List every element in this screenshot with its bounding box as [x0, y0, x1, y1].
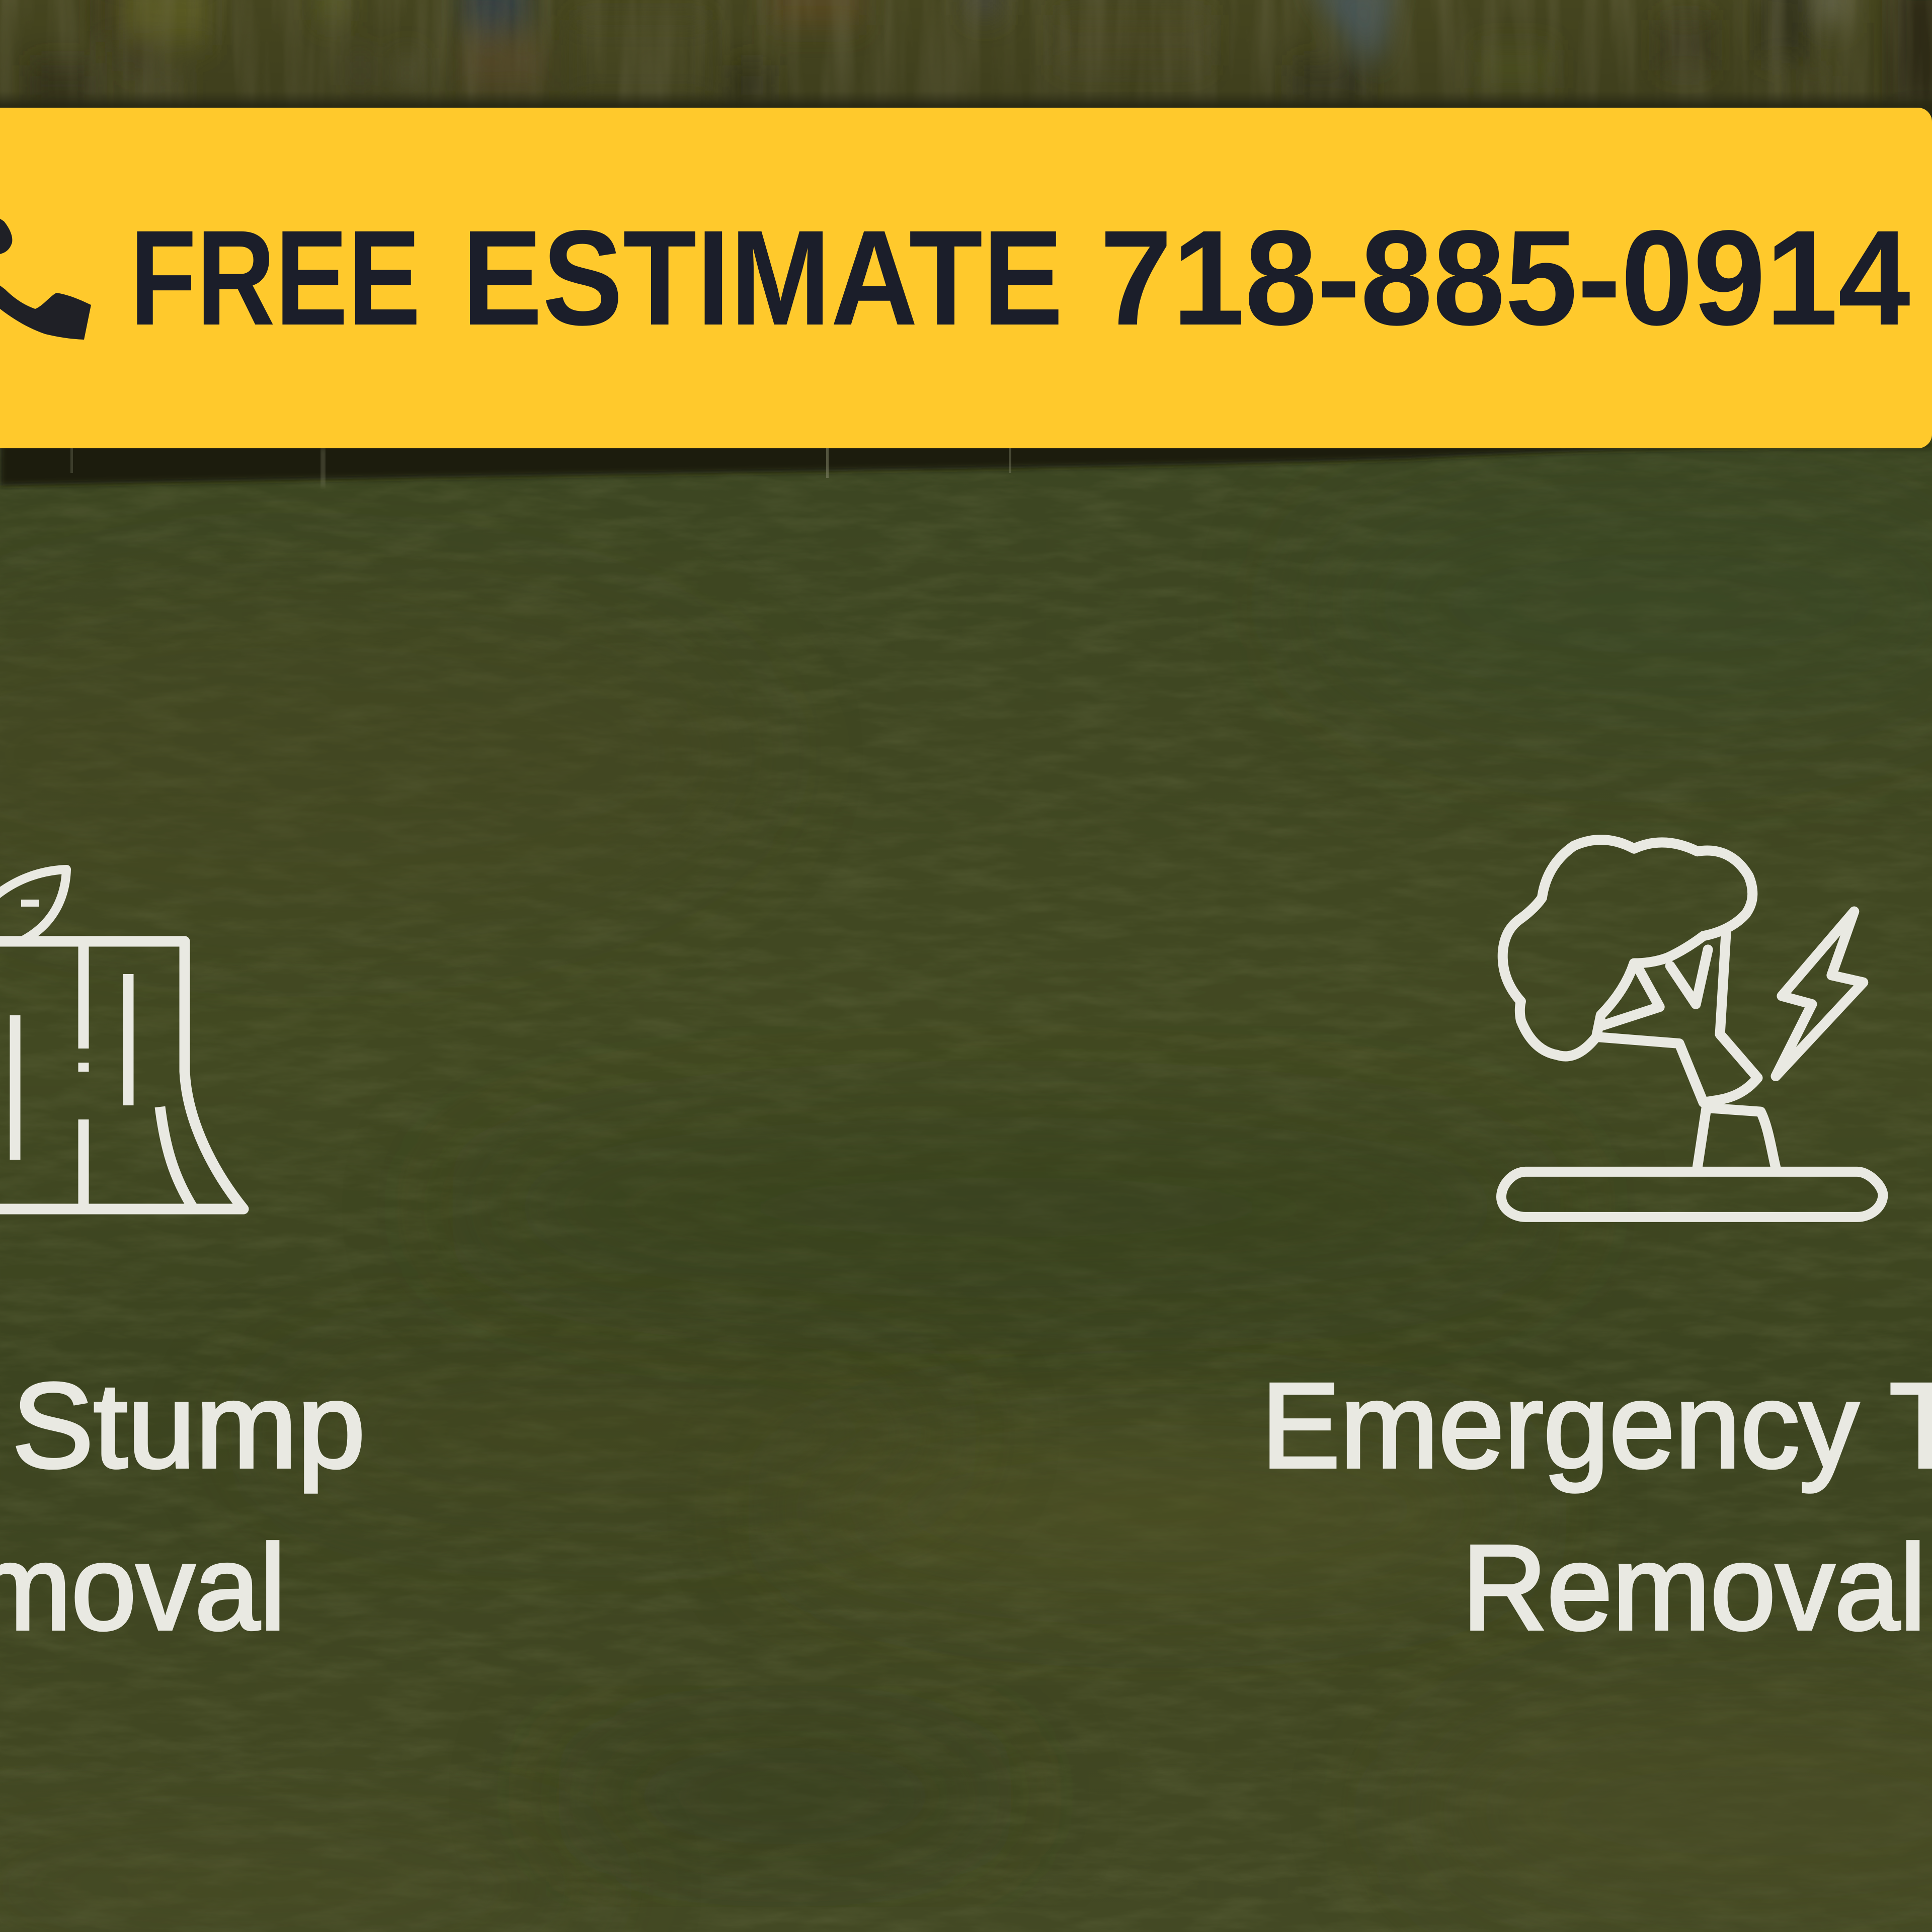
banner text: FREE [130, 202, 421, 354]
icon: tree stump [0, 869, 244, 1209]
background: dark hedge shadow under the banner [0, 443, 1932, 486]
service: tree stump removal [0, 869, 399, 1655]
icon: storm damaged tree with lightning bolt [1501, 840, 1883, 1217]
label: Removal [1462, 1520, 1926, 1655]
service: emergency tree removal [1261, 840, 1932, 1655]
background: blurred tree line at top [0, 0, 1932, 117]
icon: phone handset [0, 215, 91, 340]
banner: free estimate call to action [0, 108, 1932, 448]
background: grass lawn [0, 443, 1932, 1932]
banner text: ESTIMATE [462, 202, 1063, 354]
banner text: 718-885-0914 [1100, 202, 1911, 354]
